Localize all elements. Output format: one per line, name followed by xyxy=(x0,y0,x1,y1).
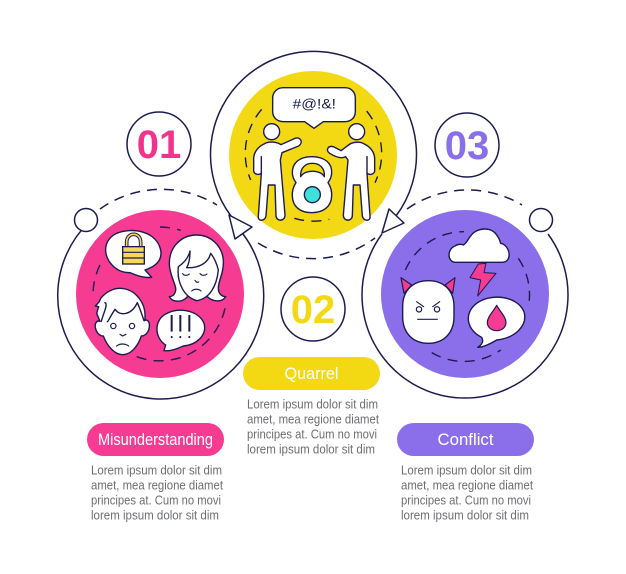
inner dashed ring xyxy=(93,227,225,361)
text block: quarrel description: lorem ipsum dolor sit dim xyxy=(247,442,375,456)
text block: quarrel description: amet, mea regione diamet xyxy=(247,412,379,426)
dashed arc: conflict xyxy=(407,190,522,209)
text block: conflict description: principes at. Cum no movi xyxy=(401,492,531,508)
number badge 02 xyxy=(281,277,345,341)
icon: storm cloud xyxy=(449,229,509,262)
text block: quarrel description: principes at. Cum no movi xyxy=(247,426,377,442)
number badge 02: 02 xyxy=(291,288,335,332)
label pill: Conflict: Conflict xyxy=(438,431,494,449)
number badge 01 xyxy=(127,112,191,176)
purple disc xyxy=(381,210,549,378)
ring node: conflict xyxy=(530,208,552,232)
panel: misunderstanding xyxy=(58,189,264,399)
inner dashed ring xyxy=(245,109,382,221)
arrowhead: to quarrel from conflict xyxy=(382,209,404,233)
panel: quarrel xyxy=(210,51,416,259)
yellow disc xyxy=(229,71,397,239)
text block: conflict description: amet, mea regione diamet xyxy=(401,478,533,492)
label pill: Misunderstanding xyxy=(87,423,224,456)
dashed arc: quarrel xyxy=(258,238,375,259)
ring: conflict xyxy=(362,234,568,398)
text block: quarrel description: Lorem ipsum dolor sit dim xyxy=(247,396,378,412)
icons: quarrel xyxy=(245,88,382,221)
label pill: Quarrel: Quarrel xyxy=(284,365,338,383)
label pill: Quarrel xyxy=(243,357,380,390)
icons: conflict xyxy=(401,229,530,361)
text block: conflict description xyxy=(401,462,533,522)
text block: misunderstanding description: amet, mea regione diamet xyxy=(91,478,223,492)
icon: speech bubble with blood drop xyxy=(468,297,525,347)
label pill: Misunderstanding: Misunderstanding xyxy=(98,431,213,449)
number badge 01: 01 xyxy=(137,123,181,167)
ring: misunderstanding xyxy=(58,223,264,399)
icon: sad woman xyxy=(169,235,226,301)
panel: conflict xyxy=(362,190,568,398)
icons: misunderstanding xyxy=(93,227,226,361)
text block: misunderstanding description: principes at. Cum no movi xyxy=(91,492,221,508)
inner dashed ring xyxy=(405,232,530,361)
dashed arc: misunderstanding xyxy=(100,189,217,209)
ring node: misunderstanding xyxy=(74,208,98,232)
icon: devil horns xyxy=(401,278,455,293)
text block: conflict description: Lorem ipsum dolor sit dim xyxy=(401,462,532,478)
label pill: Conflict xyxy=(397,423,534,456)
ring: quarrel xyxy=(210,51,416,216)
pink disc xyxy=(76,210,244,378)
text block: misunderstanding description: lorem ipsum dolor sit dim xyxy=(91,508,219,522)
icon: lightning bolt xyxy=(470,263,496,296)
icon: person left xyxy=(254,124,301,220)
number badge 03: 03 xyxy=(445,124,489,168)
icon: person right xyxy=(327,124,375,220)
icon: angry face xyxy=(403,281,454,343)
icon: padlock xyxy=(123,234,144,264)
text block: conflict description: lorem ipsum dolor sit dim xyxy=(401,508,529,522)
number badge 03 xyxy=(435,113,499,177)
arrowhead: to quarrel xyxy=(229,215,252,239)
icon: worried man xyxy=(95,288,149,355)
text block: misunderstanding description: Lorem ipsum dolor sit dim xyxy=(91,462,222,478)
icon: lock speech bubble xyxy=(106,231,161,278)
icon: exclamation speech bubble xyxy=(157,310,205,351)
text block: quarrel description xyxy=(247,396,379,456)
text block: misunderstanding description xyxy=(91,462,223,522)
speech bubble: swearing: #@!&! xyxy=(293,96,336,112)
icon: kettlebell xyxy=(292,157,332,213)
